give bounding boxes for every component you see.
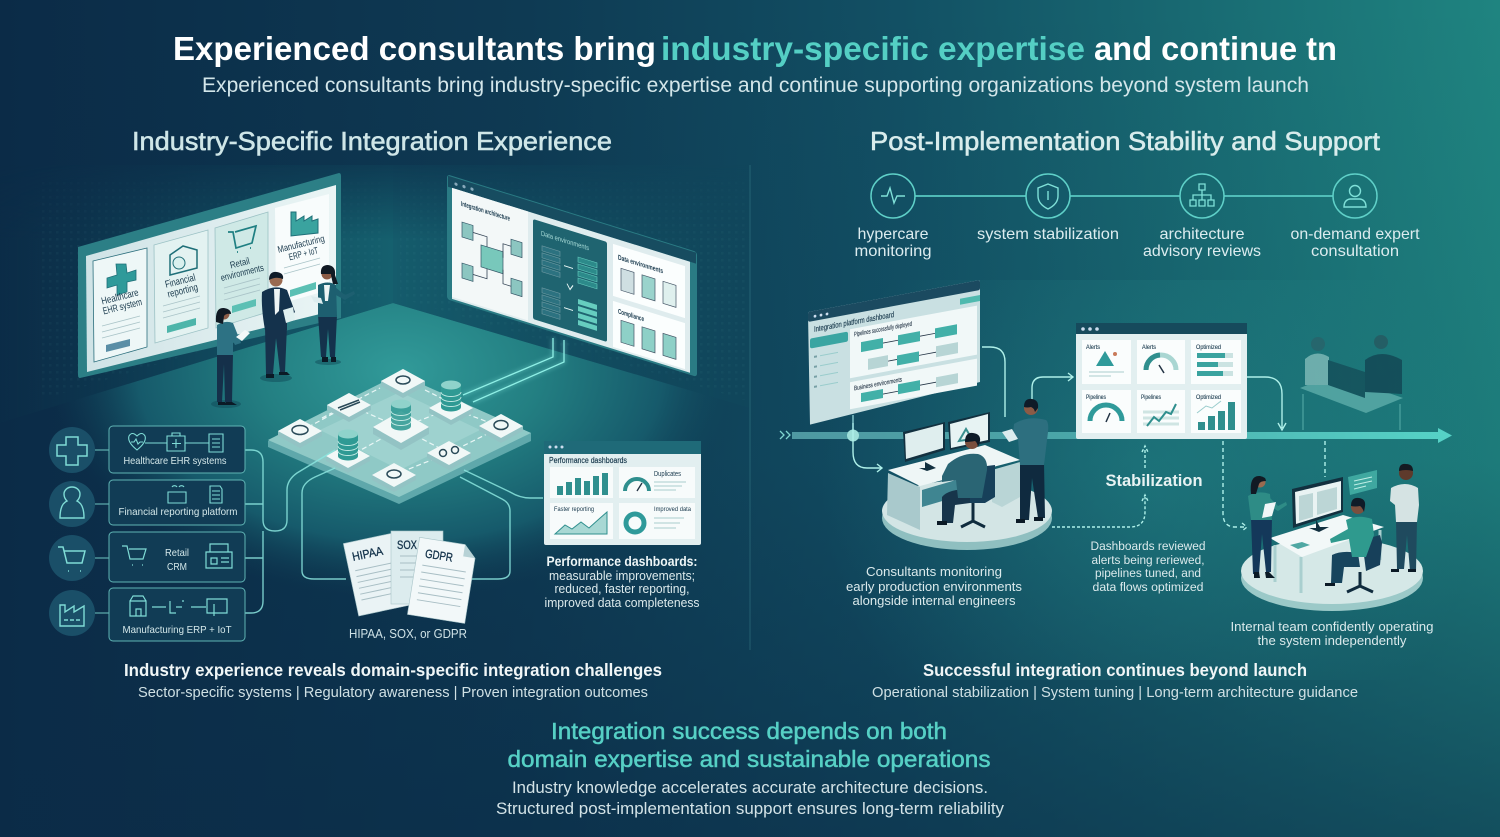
caption: dashboards reviewed: data flows optimized [1092, 580, 1204, 594]
chat bubble [1348, 470, 1377, 495]
card: alerts warning [1082, 340, 1131, 384]
database: centre [391, 400, 411, 430]
sidebar [810, 332, 848, 388]
tile: database left [326, 444, 370, 473]
card: healthcare [93, 248, 147, 362]
sector: retail [49, 532, 245, 582]
integration platform dashboard window: Integration platform dashboard [814, 310, 894, 334]
subtitle: Experienced consultants bring industry-specific expertise and continue supporting organizations beyond system launch [202, 74, 1309, 97]
tile: subsystem [327, 393, 371, 422]
panel: industry-specific integration experience [0, 126, 750, 701]
integration platform with service tiles [268, 369, 531, 504]
sector: financial: Financial reporting platform [118, 506, 238, 518]
card: healthcare: EHR system [102, 297, 143, 317]
documents: HIPAA, SOX, GDPR: GDPR [424, 547, 454, 565]
architecture diagram: Integration architecture [461, 200, 510, 223]
tile glyphs [292, 376, 508, 478]
performance dashboards caption: reduced, faster reporting, [554, 581, 690, 596]
conclusion [496, 718, 1005, 818]
connectors: sector list to platform [245, 450, 543, 613]
database: right [441, 380, 461, 412]
data pipeline panel: Data environments [541, 230, 589, 252]
sector: retail: Retail [165, 547, 189, 559]
documents: HIPAA, SOX, GDPR: HIPAA [351, 544, 384, 564]
step: system stabilization: system stabilization [977, 226, 1119, 243]
right panel takeaway: Operational stabilization | System tuning | Long-term architecture guidance [872, 684, 1358, 701]
standing man [1390, 464, 1419, 572]
left panel takeaway [124, 660, 662, 701]
card: alerts gauge: Alerts [1142, 344, 1157, 351]
tile: top [381, 369, 425, 398]
heading: left panel: Industry-Specific Integration Experience [132, 126, 612, 156]
sector: manufacturing: Manufacturing ERP + IoT [122, 624, 232, 636]
performance dashboards caption: improved data completeness [544, 595, 700, 610]
data environments panel: Data environments [618, 254, 663, 275]
compliance panel: Compliance [618, 308, 644, 323]
integration platform dashboard window [808, 280, 980, 425]
integration platform dashboard window: Business environments [854, 376, 903, 392]
area chart: faster reporting [550, 503, 613, 539]
caption: consultants monitoring: Consultants monitoring [866, 564, 1002, 579]
tile: gear [479, 414, 523, 443]
panel: post-implementation stability and support [780, 126, 1452, 701]
sector: retail: CRM [167, 561, 187, 573]
tile: left [278, 419, 322, 448]
card: optimized chart [1191, 390, 1241, 433]
step: on-demand expert consultation: on-demand expert [1290, 226, 1420, 243]
right panel takeaway: Successful integration continues beyond launch [923, 660, 1307, 680]
right wall screen: integration architecture [447, 174, 697, 377]
caption: dashboards reviewed: Dashboards reviewed [1090, 539, 1206, 553]
performance dashboards caption [544, 554, 700, 610]
area chart: faster reporting: Faster reporting [554, 506, 594, 513]
gauge: duplicates: Duplicates [654, 471, 681, 478]
performance dashboard window [544, 441, 701, 545]
database: left [338, 430, 358, 460]
card: financial reporting [154, 230, 208, 343]
monitors [903, 412, 990, 471]
step: on-demand expert consultation: consultation [1311, 243, 1399, 260]
performance dashboards caption: Performance dashboards: [546, 554, 698, 569]
sector list [49, 426, 245, 641]
button [960, 295, 980, 305]
card: manufacturing [275, 194, 329, 305]
sector: manufacturing [49, 588, 245, 641]
title: Experienced consultants bring [173, 30, 656, 67]
left panel takeaway: Sector-specific systems | Regulatory awareness | Proven integration outcomes [138, 684, 648, 701]
card: pipelines trend [1137, 390, 1185, 433]
left panel takeaway: Industry experience reveals domain-specific integration challenges [124, 660, 662, 680]
data pipeline panel [533, 219, 607, 342]
scene: consultants monitoring [882, 399, 1052, 550]
card: pipelines gauge [1082, 390, 1131, 433]
caption: dashboards reviewed: pipelines tuned, and [1095, 566, 1201, 580]
link: dashboard to timeline node [852, 415, 854, 430]
performance dashboards caption: measurable improvements; [549, 568, 695, 583]
sector: healthcare: Healthcare EHR systems [124, 455, 226, 467]
card: pipelines gauge: Pipelines [1086, 394, 1107, 401]
performance dashboard window: Performance dashboards [549, 456, 627, 465]
main arrow [780, 428, 1452, 443]
caption: internal team: Internal team confidently operating [1230, 619, 1434, 634]
card: manufacturing: Manufacturing [277, 233, 326, 256]
support timeline [854, 174, 1420, 260]
card: retail: Retail [229, 256, 251, 271]
caption: consultants monitoring: alongside internal engineers [852, 593, 1016, 608]
step: on-demand expert consultation [1290, 174, 1420, 260]
conclusion: Structured post-implementation support ensures long-term reliability [496, 800, 1005, 818]
donut: improved data: Improved data [654, 506, 691, 513]
faded consultants at desk [1300, 335, 1403, 430]
caption: consultants monitoring [846, 564, 1022, 608]
caption: dashboards reviewed [1090, 539, 1206, 594]
standing consultant [1002, 399, 1048, 523]
step: hypercare monitoring: monitoring [854, 243, 932, 260]
card: optimized bars [1191, 340, 1241, 384]
donut: improved data [619, 503, 695, 539]
flow connectors [853, 347, 1325, 531]
card: retail: environments [220, 263, 265, 284]
documents caption: HIPAA, SOX, or GDPR [349, 626, 467, 641]
card: financial reporting: reporting [166, 282, 199, 300]
desk [887, 445, 1020, 530]
card: alerts warning: Alerts [1086, 344, 1101, 351]
integration platform dashboard window: Pipelines successfully deployed [854, 321, 912, 338]
left wall screen: industry cards [78, 173, 341, 378]
step: hypercare monitoring: hypercare [858, 226, 929, 243]
data environments panel [613, 244, 685, 318]
tile: link [427, 441, 471, 470]
heading: right panel: Post-Implementation Stability and Support [870, 126, 1381, 156]
gauge: duplicates [619, 467, 695, 498]
conclusion: Integration success depends on both [551, 718, 947, 744]
step: architecture advisory reviews [1143, 174, 1261, 260]
card: alerts gauge [1137, 340, 1185, 384]
tile: database right [429, 396, 473, 425]
desk [1270, 515, 1384, 593]
step: architecture advisory reviews: architecture [1160, 226, 1245, 243]
step: architecture advisory reviews: advisory reviews [1143, 243, 1261, 260]
stabilization label: Stabilization [1106, 472, 1202, 490]
tile: bottom [372, 463, 416, 492]
person: lead consultant [260, 272, 295, 382]
card: manufacturing: ERP + IoT [288, 245, 320, 263]
monitoring dashboard window [1076, 323, 1247, 439]
panel divider [749, 165, 751, 650]
bar chart [550, 467, 613, 498]
card: financial reporting: Financial [164, 272, 197, 291]
title: industry-specific expertise [661, 30, 1085, 67]
caption: internal team [1230, 619, 1434, 648]
conclusion: Industry knowledge accelerates accurate architecture decisions. [512, 779, 988, 797]
conclusion: domain expertise and sustainable operations [508, 746, 990, 772]
woman with tablet [1248, 476, 1287, 578]
person: consultant with tablet [211, 308, 250, 408]
caption: consultants monitoring: early production environments [846, 579, 1022, 594]
step: hypercare monitoring [854, 174, 932, 260]
compliance panel [613, 301, 685, 369]
card: pipelines trend: Pipelines [1141, 394, 1162, 401]
caption: internal team: the system independently [1258, 633, 1407, 648]
right panel takeaway [872, 660, 1358, 701]
documents: HIPAA, SOX, GDPR [343, 531, 477, 623]
sector: financial [49, 480, 245, 527]
room: isometric walls and floor [42, 168, 730, 574]
sector: healthcare [49, 426, 245, 473]
card: healthcare: Healthcare [100, 287, 140, 307]
seated man [1325, 498, 1382, 592]
documents: HIPAA, SOX, GDPR: SOX [397, 538, 417, 552]
person: woman presenting [311, 265, 355, 365]
caption: dashboards reviewed: alerts being reriewed, [1092, 553, 1204, 567]
monitor [1292, 477, 1343, 532]
card: retail [215, 212, 268, 328]
tile: centre hub [373, 411, 429, 450]
step: system stabilization [977, 174, 1119, 243]
scene: internal team operating [1241, 464, 1423, 611]
architecture diagram [452, 188, 528, 320]
glowing link from screen to platform [463, 338, 564, 402]
title: and continue tn [1094, 30, 1337, 67]
card: optimized chart: Optimized [1196, 394, 1221, 401]
card: optimized bars: Optimized [1196, 344, 1221, 351]
seated consultant [937, 433, 995, 527]
